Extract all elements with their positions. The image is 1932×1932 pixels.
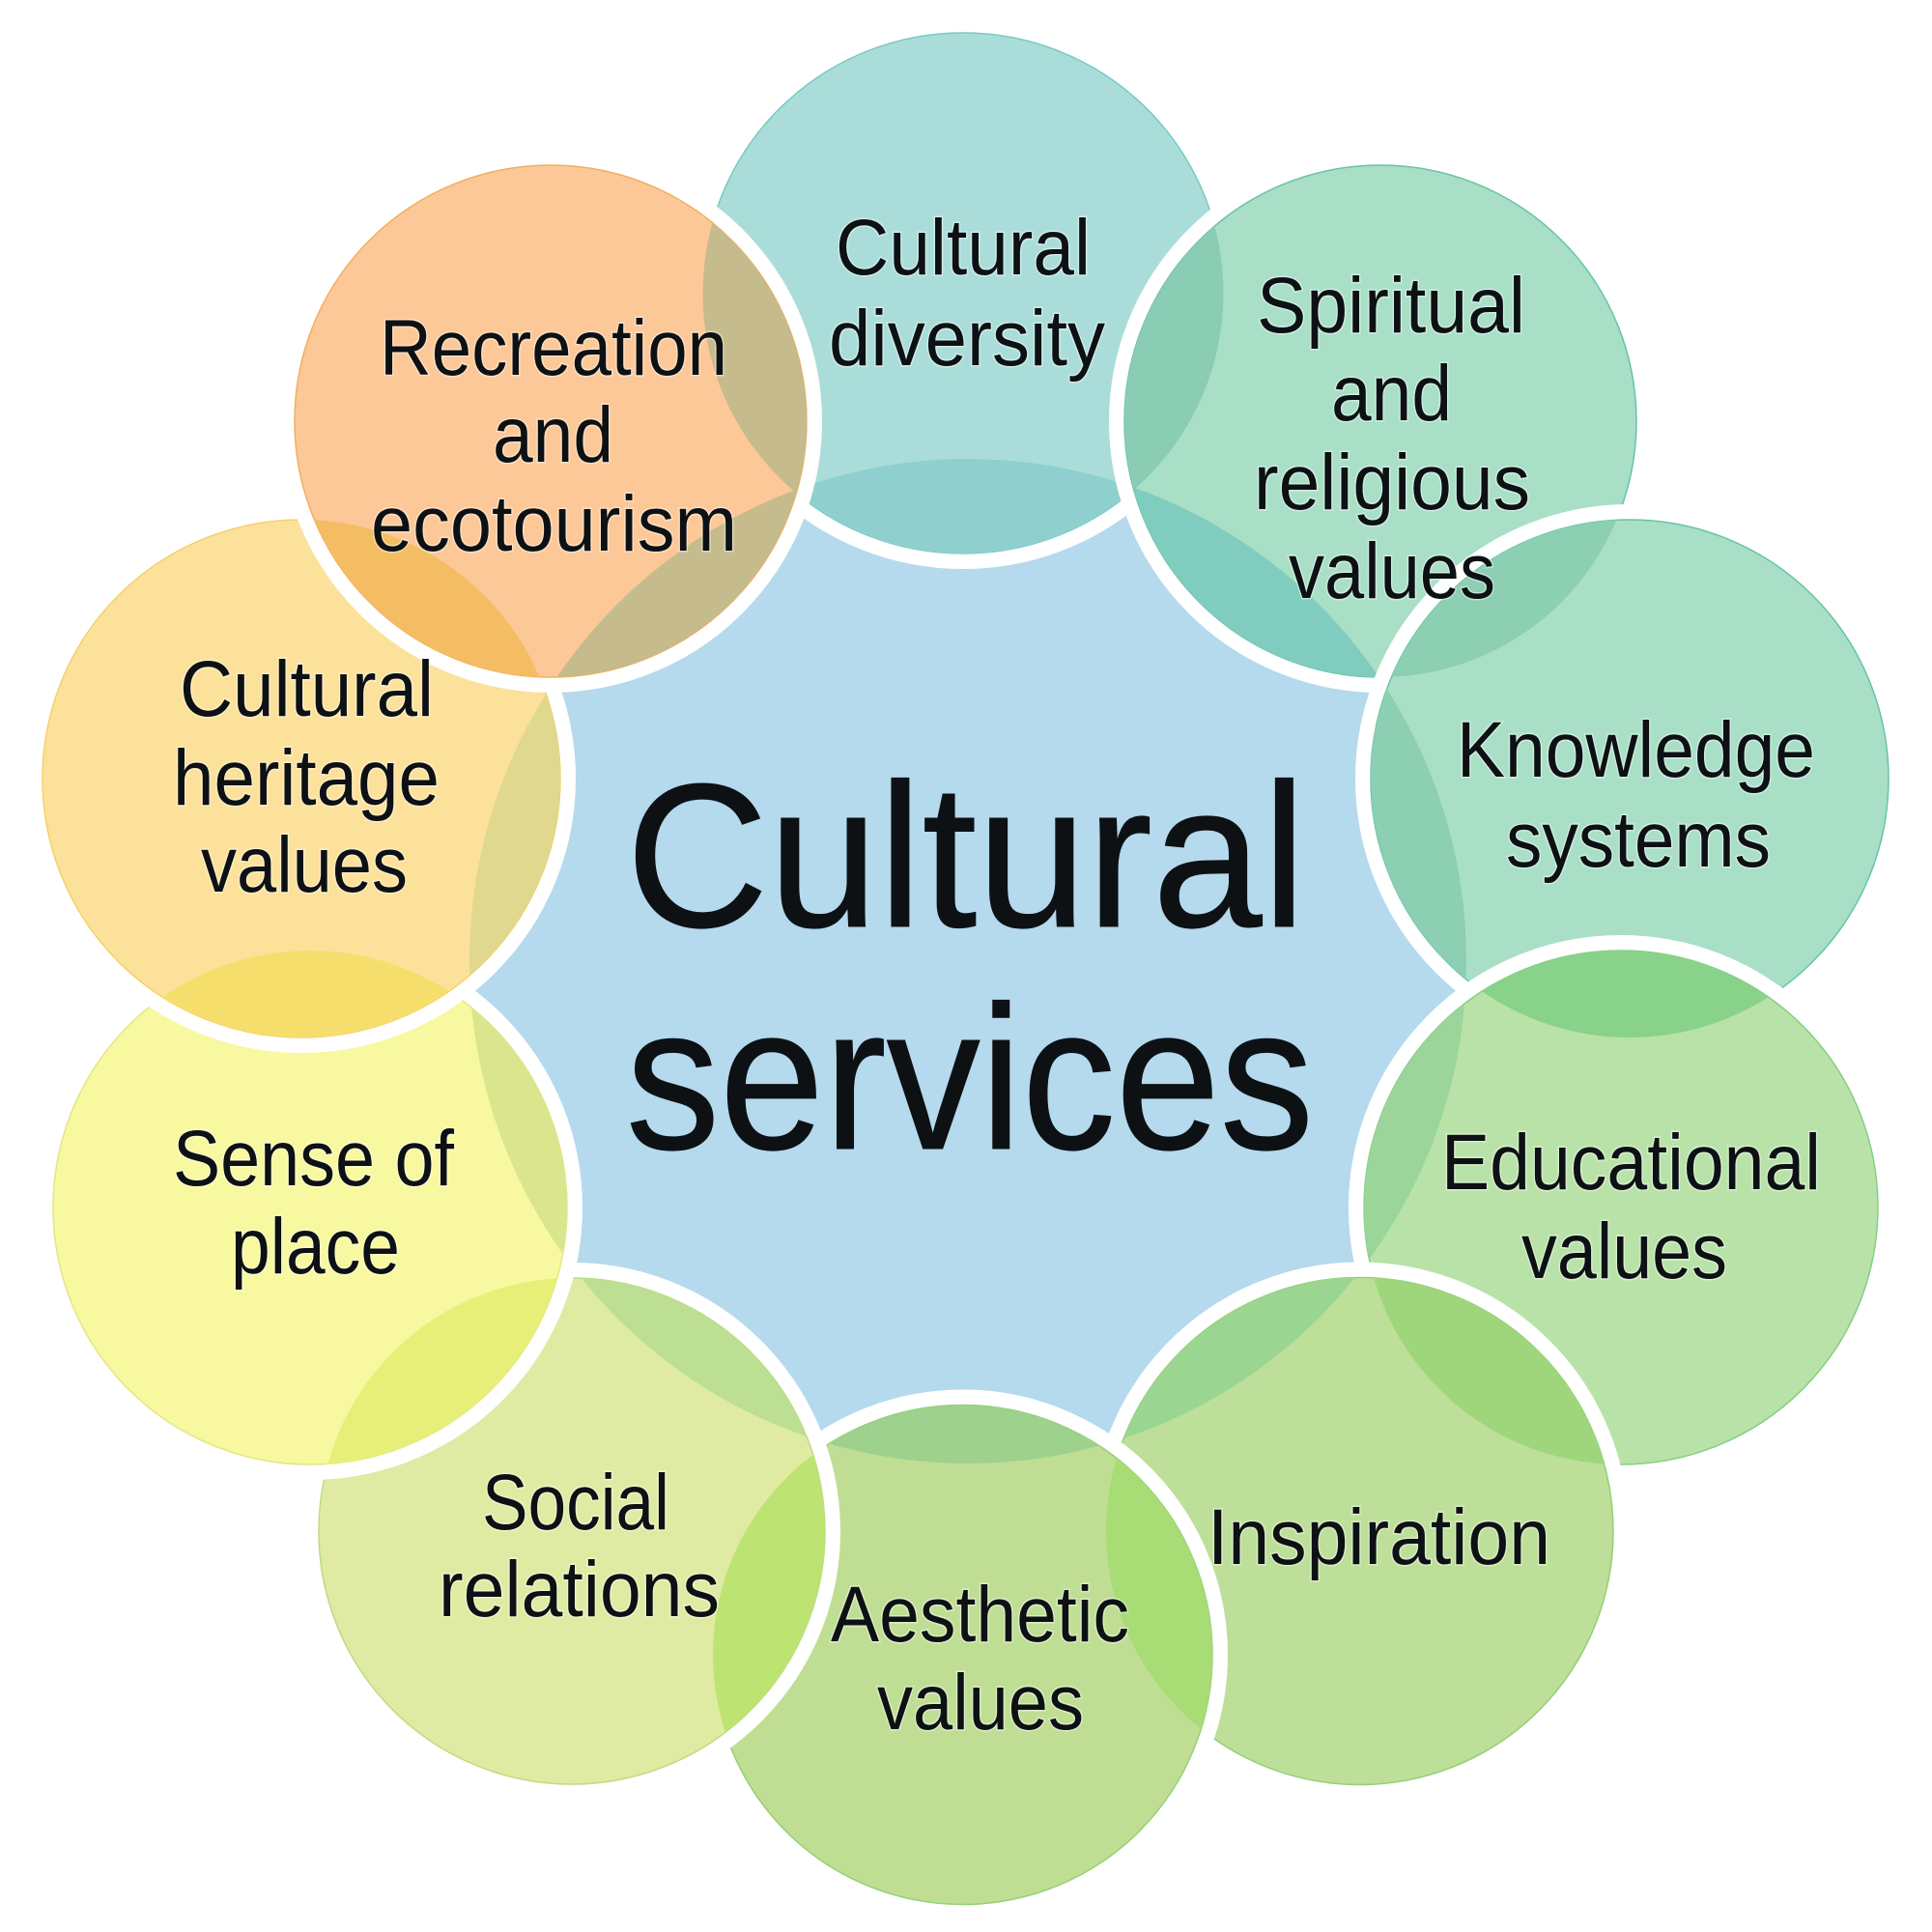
label: Aesthetic values bbox=[831, 1571, 1129, 1747]
circle: Knowledge systems bbox=[1355, 504, 1889, 991]
label: Cultural heritage values: Cultural bbox=[180, 645, 434, 733]
label: Cultural diversity: Cultural bbox=[836, 204, 1091, 292]
label: Spiritual and religious values: religious bbox=[1254, 439, 1530, 526]
label: Recreation and ecotourism: ecotourism bbox=[371, 480, 737, 568]
label: Cultural heritage values: heritage bbox=[173, 734, 440, 822]
label: Inspiration: Inspiration bbox=[1208, 1493, 1550, 1581]
label: Spiritual and religious values: and bbox=[1331, 350, 1452, 438]
label: Spiritual and religious values: values bbox=[1289, 527, 1495, 615]
central circle: Cultural services bbox=[469, 459, 1466, 1463]
label: Cultural diversity: diversity bbox=[829, 295, 1105, 383]
title: Cultural services: Cultural bbox=[626, 741, 1306, 970]
label: Social relations: Social bbox=[482, 1459, 669, 1547]
title: Cultural services: services bbox=[626, 963, 1314, 1192]
circle: Cultural heritage values bbox=[42, 519, 576, 1053]
label: Sense of place: place bbox=[231, 1203, 400, 1291]
label: Sense of place bbox=[173, 1115, 454, 1291]
label: Aesthetic values: values bbox=[877, 1659, 1084, 1747]
label: Recreation and ecotourism: Recreation bbox=[380, 304, 727, 392]
label: Educational values: values bbox=[1521, 1208, 1727, 1295]
circle: Social relations bbox=[318, 1263, 840, 1785]
label: Knowledge systems: Knowledge bbox=[1457, 706, 1815, 794]
label: Social relations: relations bbox=[439, 1546, 720, 1634]
title: Cultural services bbox=[626, 741, 1314, 1192]
label: Spiritual and religious values bbox=[1254, 262, 1530, 615]
circle: Spiritual and religious values bbox=[1109, 164, 1637, 693]
label: Aesthetic values: Aesthetic bbox=[831, 1571, 1129, 1659]
circle: Inspiration bbox=[1109, 1262, 1621, 1785]
circle: Educational values bbox=[1349, 935, 1879, 1465]
circle: Recreation and ecotourism bbox=[294, 164, 822, 693]
label: Educational values: Educational bbox=[1441, 1119, 1821, 1207]
circle: Sense of place bbox=[52, 991, 582, 1480]
label: Cultural diversity bbox=[829, 204, 1105, 383]
label: Recreation and ecotourism bbox=[371, 304, 737, 568]
circle: Aesthetic values bbox=[730, 1389, 1228, 1905]
label: Sense of place: Sense of bbox=[173, 1115, 454, 1203]
label: Educational values bbox=[1441, 1119, 1821, 1295]
label: Social relations bbox=[439, 1459, 720, 1634]
label: Cultural heritage values bbox=[173, 645, 440, 909]
label: Cultural heritage values: values bbox=[201, 821, 408, 909]
label: Knowledge systems bbox=[1457, 706, 1815, 884]
circle: Cultural diversity bbox=[717, 32, 1210, 569]
label: Recreation and ecotourism: and bbox=[493, 391, 613, 479]
label: Knowledge systems: systems bbox=[1506, 796, 1771, 884]
label: Spiritual and religious values: Spiritual bbox=[1257, 262, 1525, 350]
